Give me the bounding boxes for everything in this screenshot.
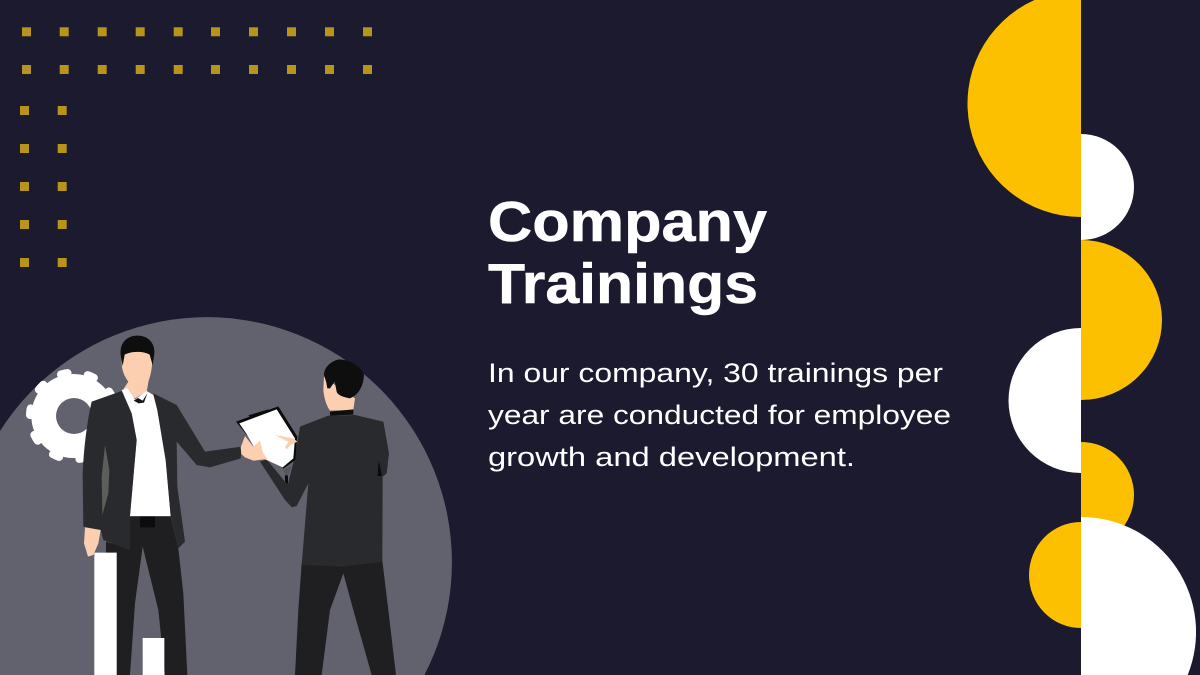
decorative half circles: right column: [967, 0, 1196, 675]
title: [488, 190, 767, 316]
bar chart: white bars: [94, 553, 164, 675]
body text: year are conducted for employee: [488, 400, 951, 430]
body text: In our company, 30 trainings per: [488, 358, 943, 388]
figure: man seen from behind: [260, 359, 396, 675]
title: Trainings: [488, 252, 758, 316]
figure: man facing right: [83, 336, 242, 675]
illustration: two businessmen reviewing a clipboard: [0, 317, 452, 675]
grey background circle: [0, 317, 452, 675]
icon: clipboard: [236, 406, 297, 469]
icon: gear: [29, 372, 117, 460]
body text: growth and development.: [488, 442, 855, 472]
dot grid: top left: [20, 27, 372, 267]
illustration artwork: [29, 336, 396, 675]
title: Company: [488, 190, 767, 254]
hands: fingers on clipboard: [241, 435, 297, 461]
body text: [488, 358, 951, 472]
